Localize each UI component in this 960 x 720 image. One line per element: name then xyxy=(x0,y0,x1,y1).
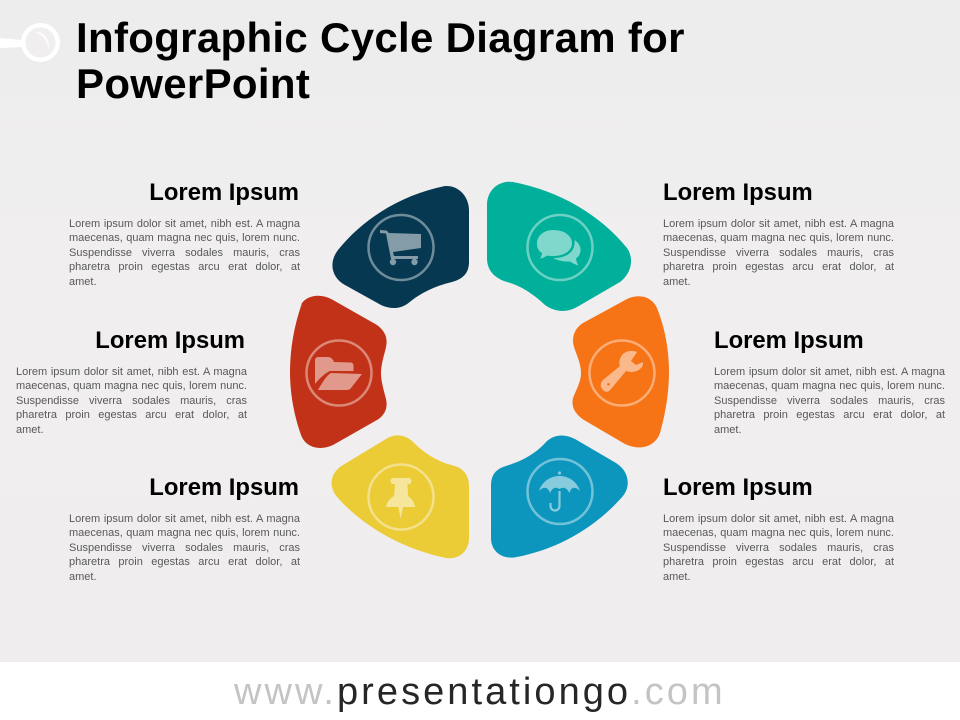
heading: yellow: Lorem Ipsum xyxy=(149,474,299,501)
title: PowerPoint xyxy=(76,60,310,107)
text: blue: pharetra proin egestas arcu erat dolor, at xyxy=(663,556,894,568)
segment: red folder xyxy=(290,296,387,448)
segment: orange wrench xyxy=(572,296,669,447)
segment: teal chat xyxy=(487,182,631,311)
text: yellow: pharetra proin egestas arcu erat dolor, at xyxy=(69,556,300,568)
heading: navy: Lorem Ipsum xyxy=(149,179,299,206)
text: red: Suspendisse viverra sodales mauris, cras xyxy=(16,395,247,407)
text: yellow: amet. xyxy=(69,571,97,583)
text: yellow: Lorem ipsum dolor sit amet, nibh est. A magna xyxy=(69,512,300,524)
text: blue xyxy=(663,512,894,583)
text: orange: amet. xyxy=(714,424,742,436)
text: red: pharetra proin egestas arcu erat dolor, at xyxy=(16,409,247,421)
footer: website URL xyxy=(0,662,960,720)
text: teal: Lorem ipsum dolor sit amet, nibh est. A magna xyxy=(663,218,894,230)
heading: red: Lorem Ipsum xyxy=(95,327,245,354)
text: yellow xyxy=(69,512,300,583)
text: red: Lorem ipsum dolor sit amet, nibh est. A magna xyxy=(16,366,247,378)
text: navy: maecenas, quam magna nec quis, lorem nunc. xyxy=(69,232,300,244)
text: teal: amet. xyxy=(663,276,691,288)
text: orange xyxy=(714,366,945,436)
heading: teal: Lorem Ipsum xyxy=(663,179,813,206)
text: yellow: maecenas, quam magna nec quis, lorem nunc. xyxy=(69,527,300,539)
text: red: amet. xyxy=(16,424,44,436)
text: navy: pharetra proin egestas arcu erat dolor, at xyxy=(69,261,300,273)
text: teal: pharetra proin egestas arcu erat dolor, at xyxy=(663,261,894,273)
text: navy: amet. xyxy=(69,276,97,288)
segment: yellow pin xyxy=(332,435,469,558)
text: blue: maecenas, quam magna nec quis, lorem nunc. xyxy=(663,527,894,539)
text: teal xyxy=(663,218,894,288)
segment: blue umbrella xyxy=(491,435,628,558)
text: red xyxy=(16,366,247,436)
title xyxy=(76,14,685,107)
text: navy: Suspendisse viverra sodales mauris, cras xyxy=(69,247,300,259)
text: yellow: Suspendisse viverra sodales mauris, cras xyxy=(69,542,300,554)
text: blue: amet. xyxy=(663,571,691,583)
text: teal: maecenas, quam magna nec quis, lorem nunc. xyxy=(663,232,894,244)
text: orange: maecenas, quam magna nec quis, lorem nunc. xyxy=(714,380,945,392)
text: navy xyxy=(69,218,300,288)
heading: orange: Lorem Ipsum xyxy=(714,327,864,354)
text: teal: Suspendisse viverra sodales mauris, cras xyxy=(663,247,894,259)
text: orange: pharetra proin egestas arcu erat dolor, at xyxy=(714,409,945,421)
text: orange: Suspendisse viverra sodales mauris, cras xyxy=(714,395,945,407)
text: orange: Lorem ipsum dolor sit amet, nibh est. A magna xyxy=(714,366,945,378)
text: red: maecenas, quam magna nec quis, lorem nunc. xyxy=(16,380,247,392)
heading: blue: Lorem Ipsum xyxy=(663,474,813,501)
title: Infographic Cycle Diagram for xyxy=(76,14,685,61)
segment: navy cart xyxy=(332,186,469,308)
footer: website URL: www.presentationgo.com xyxy=(234,671,726,713)
text: blue: Lorem ipsum dolor sit amet, nibh est. A magna xyxy=(663,512,894,524)
logo: ring pin xyxy=(0,23,60,62)
text: navy: Lorem ipsum dolor sit amet, nibh est. A magna xyxy=(69,218,300,230)
text: blue: Suspendisse viverra sodales mauris, cras xyxy=(663,542,894,554)
